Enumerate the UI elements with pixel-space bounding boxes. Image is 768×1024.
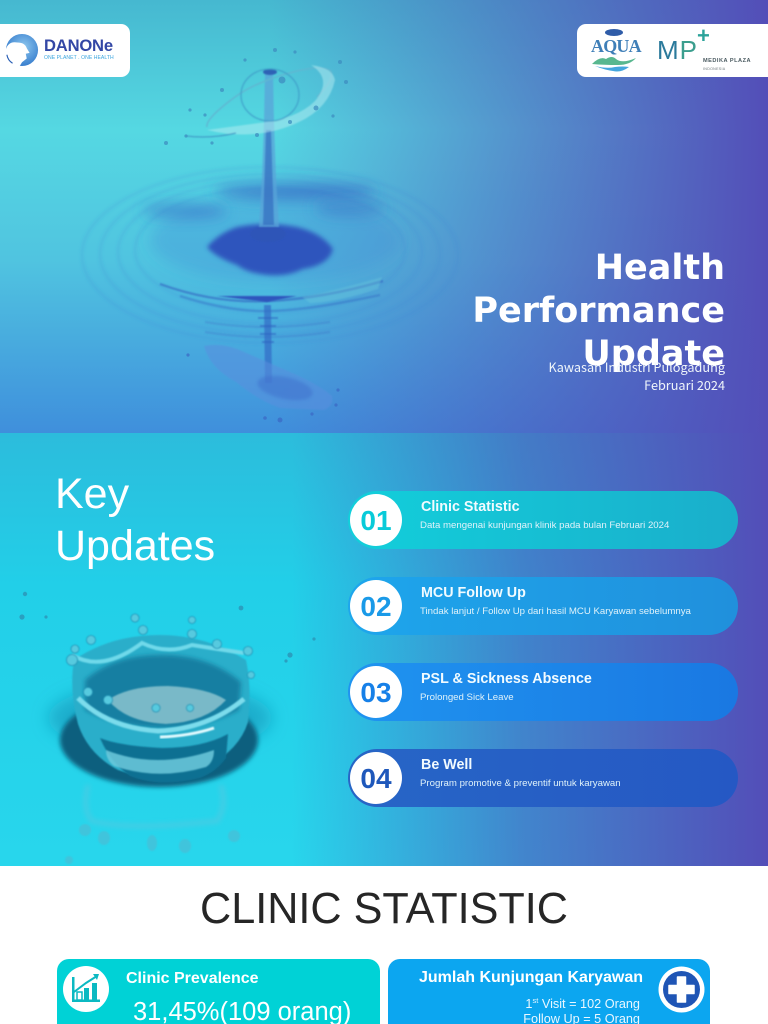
illustration: water droplet splash: [88, 48, 400, 422]
title: [472, 248, 725, 374]
item title: MCU Follow Up: [421, 585, 526, 601]
item description: Prolonged Sick Leave: [420, 692, 514, 702]
logo tagline: ONE PLANET . ONE HEALTH: [44, 55, 114, 61]
number badge 03: 03: [360, 677, 392, 708]
agenda item 02: [348, 577, 738, 635]
first visit count: 1st Visit = 102 Orang: [525, 996, 640, 1011]
panel: clinic statistic section: [0, 866, 768, 1024]
item title: PSL & Sickness Absence: [421, 671, 592, 687]
icon: growth chart: [63, 966, 109, 1012]
item title: Clinic Statistic: [421, 499, 520, 515]
subtitle: Kawasan Industri Pulogadung: [549, 357, 725, 376]
logo text: MP: MP: [657, 35, 698, 65]
background gradient overlay: [0, 433, 768, 866]
logo text: Indonesia: INDONESIA: [703, 67, 725, 71]
item description: Program promotive & preventif untuk karyawan: [420, 778, 621, 788]
background gradient overlay: [0, 0, 768, 433]
agenda item 03: [348, 663, 738, 721]
icon: medical plus: [658, 966, 704, 1012]
heading: Key Updates: Updates: [55, 522, 215, 570]
number badge 02: [350, 580, 402, 632]
illustration: water crown splash: [20, 592, 316, 864]
item description: Tindak lanjut / Follow Up dari hasil MCU Karyawan sebelumnya: [420, 606, 691, 616]
agenda item 04: [348, 749, 738, 807]
logo card: Aqua and Medika Plaza: [577, 24, 768, 77]
title: Performance: [472, 291, 725, 331]
icon: MP plus sign: +: [697, 23, 710, 48]
number badge 02: 02: [360, 591, 392, 622]
number badge 04: 04: [360, 763, 392, 794]
number badge 01: 01: [360, 505, 392, 536]
card: clinic prevalence: [57, 959, 380, 1024]
item description: Data mengenai kunjungan klinik pada bulan Februari 2024: [420, 520, 669, 530]
card title: Jumlah Kunjungan Karyawan: [419, 969, 643, 986]
card title: Clinic Prevalence: [126, 970, 259, 987]
heading: Key Updates: Key: [55, 470, 129, 518]
panel: key updates section: [0, 433, 768, 866]
number badge 04: [350, 752, 402, 804]
subtitle: Februari 2024: [644, 375, 725, 394]
logo text: Danone wordmark: DANONe: [44, 36, 113, 55]
number badge 01: [350, 494, 402, 546]
icon: Aqua badge: [605, 29, 623, 36]
heading: Key Updates: [55, 470, 215, 570]
logo text: Aqua: AQUA: [591, 36, 641, 56]
agenda item 01: [348, 491, 738, 549]
heading: Clinic Statistic: CLINIC STATISTIC: [200, 885, 568, 933]
logo text: Medika Plaza: MEDIKA PLAZA: [703, 58, 751, 64]
title: Update: [582, 334, 725, 374]
icon: Danone globe: [6, 34, 38, 66]
subtitle: [549, 357, 725, 394]
card: employee visits: [388, 959, 710, 1024]
number badge 03: [350, 666, 402, 718]
panel: hero section: [0, 0, 768, 433]
title: Health: [595, 248, 725, 288]
item title: Be Well: [421, 757, 472, 773]
logo card: Danone: [0, 24, 130, 77]
icon: Aqua mountain wave: [592, 57, 636, 72]
